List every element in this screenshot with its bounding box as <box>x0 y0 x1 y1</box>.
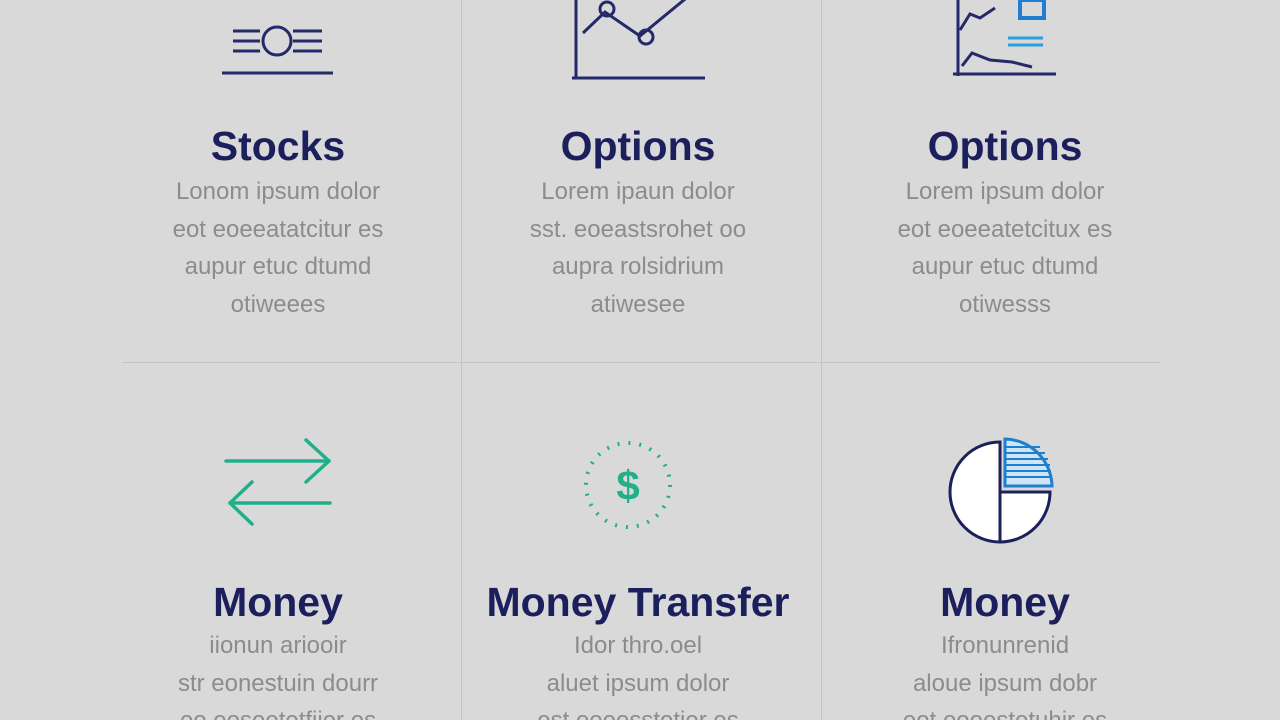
text: options: aupra rolsidrium <box>552 253 724 280</box>
heading: options 2: Options <box>928 123 1082 169</box>
text: options 2 <box>898 178 1112 318</box>
text: money 2: aloue ipsum dobr <box>913 670 1097 696</box>
text: options: Lorem ipaun dolor <box>541 178 735 205</box>
text: money transfer <box>537 632 739 720</box>
heading: options: Options <box>561 123 715 169</box>
text: stocks: otiweees <box>231 290 325 318</box>
icon: options line chart <box>572 0 705 80</box>
icon: exchange arrows <box>224 438 332 526</box>
text: options <box>530 178 746 318</box>
text: money transfer: aluet ipsum dolor <box>547 670 729 696</box>
heading: stocks: Stocks <box>211 123 345 169</box>
text: options: atiwesee <box>591 290 685 318</box>
text: options 2: Lorem ipsum dolor <box>906 178 1104 205</box>
text: money <box>178 632 378 720</box>
text: stocks: eot eoeeatatcitur es <box>173 216 383 242</box>
text: money transfer: Idor thro.oel <box>574 632 702 659</box>
heading: money 2: Money <box>940 579 1070 625</box>
icon: stocks lines <box>222 26 333 74</box>
icon: dollar dotted circle: $ <box>616 462 640 509</box>
text: options 2: aupur etuc dtumd <box>912 253 1098 280</box>
text: stocks: aupur etuc dtumd <box>185 253 371 280</box>
text: options: sst. eoeastsrohet oo <box>530 216 746 242</box>
heading: money: Money <box>213 579 343 625</box>
text: money: iionun ariooir <box>209 632 347 659</box>
icon: pie chart <box>948 438 1054 544</box>
text: options 2: otiwesss <box>959 290 1051 318</box>
heading: money transfer: Money Transfer <box>486 579 790 625</box>
text: stocks: Lonom ipsum dolor <box>176 178 380 205</box>
icon: dollar dotted circle <box>584 441 672 529</box>
text: money: str eonestuin dourr <box>178 670 378 696</box>
icon: options chart with blue <box>953 0 1056 76</box>
text: stocks <box>173 178 383 318</box>
text: money 2: Ifronunrenid <box>941 632 1069 659</box>
text: money 2 <box>903 632 1107 720</box>
text: options 2: eot eoeeatetcitux es <box>898 216 1112 242</box>
